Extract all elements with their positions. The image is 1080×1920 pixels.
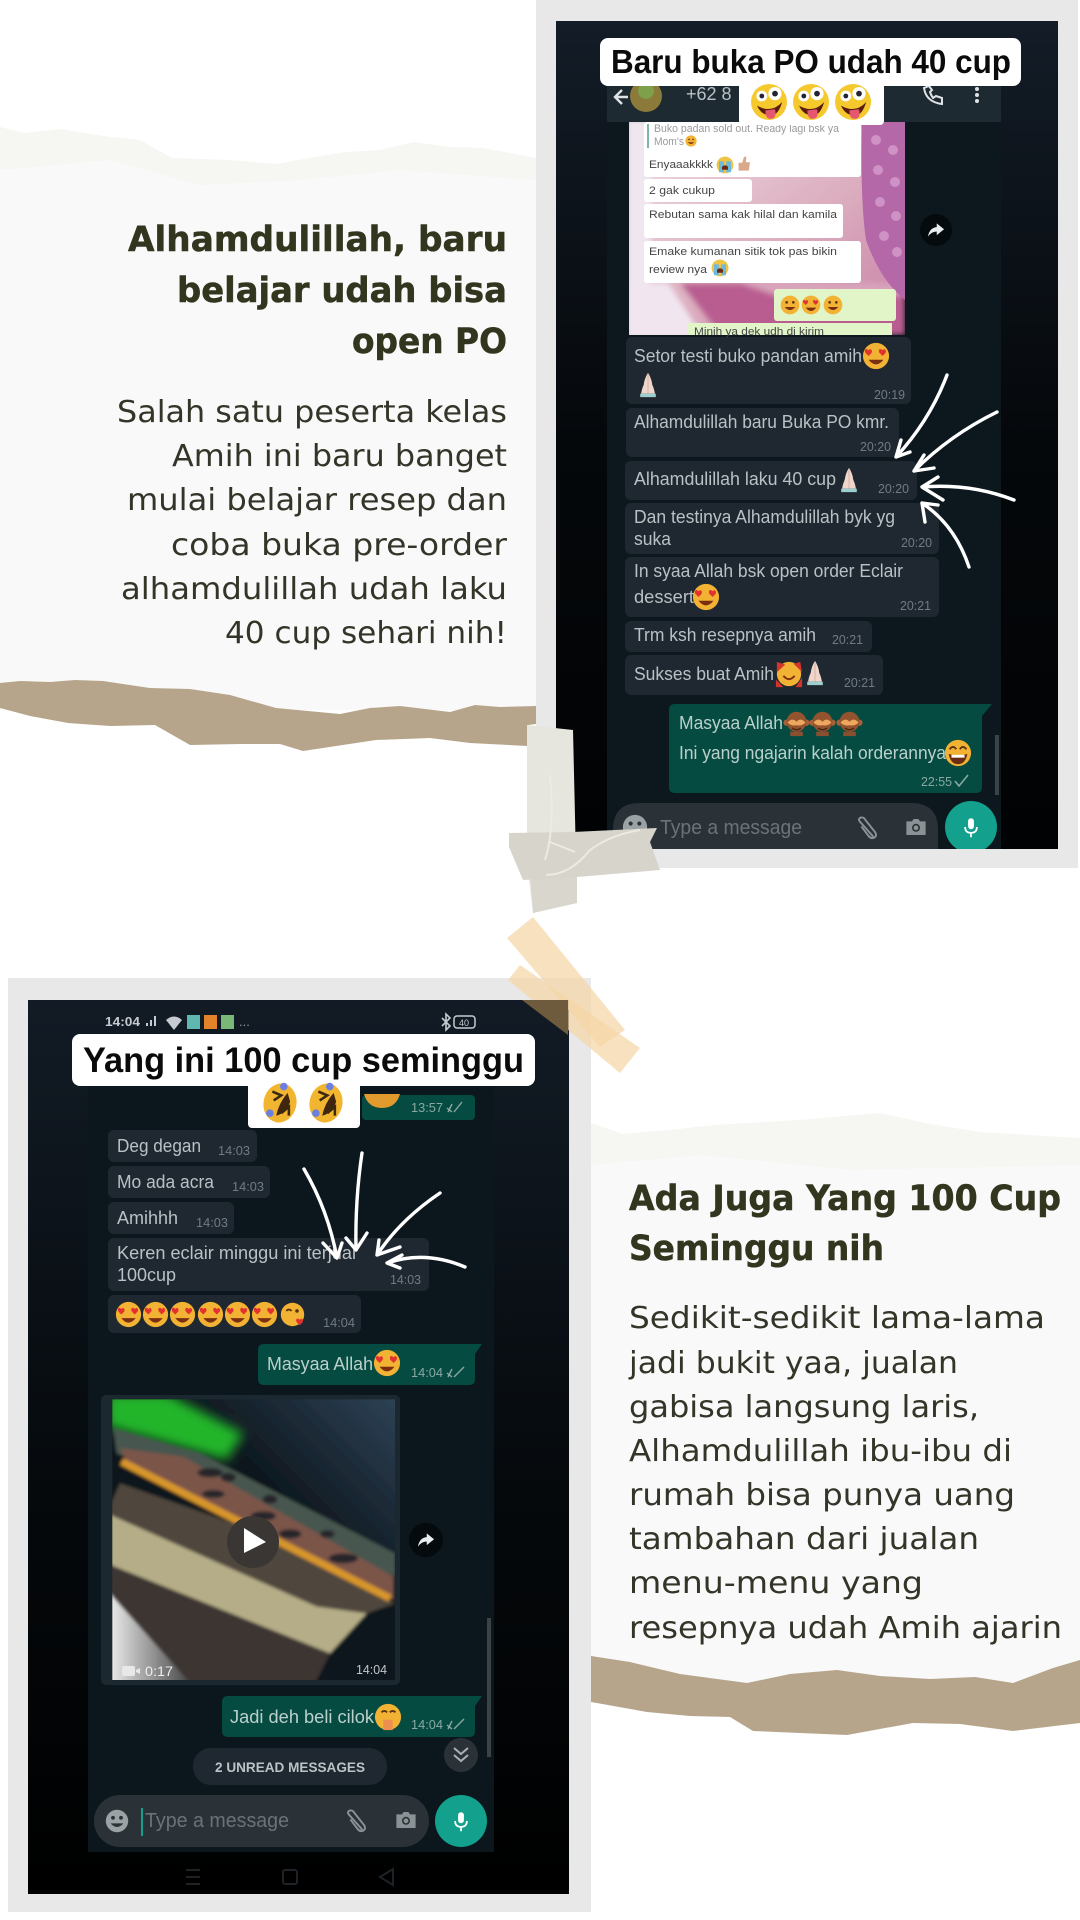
video duration: 0:17 bbox=[145, 1663, 173, 1679]
text block 1: Amih ini baru banget bbox=[172, 439, 507, 474]
unread messages pill bbox=[193, 1748, 387, 1785]
sent message sliver 13:57: 13:57 bbox=[411, 1100, 443, 1115]
mic button 2 bbox=[435, 1795, 487, 1847]
text block 2: menu-menu yang bbox=[629, 1566, 923, 1601]
received chat bubbles 2: 100cup bbox=[117, 1265, 176, 1285]
text block 2: jadi bukit yaa, jualan bbox=[628, 1346, 958, 1381]
received chat bubbles 1: Trm ksh resepnya amih bbox=[634, 625, 816, 645]
sent green bubble 1: Ini yang ngajarin kalah orderannya bbox=[679, 743, 947, 763]
panel: screenshot 2 frame bbox=[8, 978, 591, 1912]
white chat bubbles in photo: Enyaaakkkk bbox=[649, 159, 714, 171]
video duration bbox=[122, 1663, 173, 1679]
status bar bbox=[105, 1014, 475, 1030]
scrollbar 1 bbox=[995, 735, 999, 795]
sent green bubble 1: Masyaa Allah bbox=[679, 713, 783, 733]
heading 1: open PO bbox=[352, 322, 507, 362]
chat column 2 bbox=[88, 1086, 494, 1852]
text block 1: Salah satu peserta kelas bbox=[117, 395, 507, 430]
received chat bubbles 1: Sukses buat Amih bbox=[634, 664, 774, 684]
panel: torn paper note 2 bbox=[591, 1113, 1080, 1735]
white chat bubbles in photo bbox=[644, 122, 896, 338]
sent green bubble 1 bbox=[669, 704, 992, 793]
received chat bubbles 2 bbox=[108, 1130, 429, 1333]
sent bubble Masyaa Allah: Masyaa Allah bbox=[267, 1354, 373, 1374]
panel: torn paper note 1 bbox=[0, 127, 536, 751]
torn kraft paper strip 2 bbox=[591, 1656, 1080, 1735]
sent green bubble 1: 22:55 bbox=[921, 774, 952, 789]
received chat bubbles 2: Deg degan bbox=[117, 1136, 201, 1156]
white chat bubbles in photo: 2 gak cukup bbox=[649, 185, 715, 197]
white chat bubbles in photo: review nya bbox=[649, 264, 708, 276]
chat column 1 bbox=[607, 122, 1001, 849]
chat header 1: +62 8 bbox=[686, 84, 732, 104]
scroll down button bbox=[444, 1738, 478, 1772]
status bar: 40 bbox=[459, 1018, 469, 1028]
received chat bubbles 1: 20:21 bbox=[900, 598, 931, 613]
received chat bubbles 1: 20:19 bbox=[874, 387, 905, 402]
heading 1: Alhamdulillah, baru bbox=[128, 220, 507, 260]
heading 2: Seminggu nih bbox=[629, 1229, 884, 1269]
received chat bubbles 1: Dan testinya Alhamdulillah byk yg bbox=[634, 507, 895, 527]
sent bubble Masyaa Allah bbox=[258, 1344, 482, 1385]
text block 1: 40 cup sehari nih! bbox=[225, 616, 507, 651]
received chat bubbles 1: suka bbox=[634, 529, 672, 549]
unread messages pill: 2 UNREAD MESSAGES bbox=[215, 1759, 365, 1775]
white chat bubbles in photo: Buko padan sold out. Ready lagi bsk ya bbox=[654, 123, 840, 135]
arrows pointing at 40 cup message bbox=[896, 375, 1014, 567]
text block 1: mulai belajar resep dan bbox=[127, 483, 507, 518]
received chat bubbles 1: Setor testi buko pandan amih bbox=[634, 346, 862, 366]
text block 1: coba buka pre-order bbox=[171, 528, 508, 563]
purple knitted fabric bbox=[862, 122, 905, 300]
received chat bubbles 2: 14:03 bbox=[218, 1143, 250, 1158]
received chat bubbles 1: In syaa Allah bsk open order Eclair bbox=[634, 561, 903, 581]
video message: 14:04 bbox=[356, 1662, 387, 1677]
emojis caption 2 bbox=[260, 1080, 346, 1126]
sent bubble Masyaa Allah: 14:04 bbox=[411, 1365, 443, 1380]
heading 1: belajar udah bisa bbox=[177, 271, 507, 311]
received chat bubbles 1: 20:20 bbox=[878, 481, 909, 496]
text block 2 bbox=[628, 1301, 1062, 1646]
white chat bubbles in photo: Minih ya dek udh di kirim bbox=[694, 326, 824, 338]
received chat bubbles 1: Alhamdulillah laku 40 cup bbox=[634, 469, 836, 489]
sent bubble Jadi deh beli cilok: 14:04 bbox=[411, 1717, 443, 1732]
forward icon 1 bbox=[920, 214, 952, 246]
received chat bubbles 2: Mo ada acra bbox=[117, 1172, 215, 1192]
android navigation bar bbox=[186, 1869, 393, 1885]
video message bbox=[101, 1393, 400, 1687]
screenshot 2 dark area bbox=[28, 1000, 569, 1894]
status bar: ... bbox=[239, 1014, 250, 1029]
heading 2: Ada Juga Yang 100 Cup bbox=[629, 1179, 1061, 1219]
white chat bubbles in photo: Mom's bbox=[654, 136, 684, 148]
text block 1: alhamdulillah udah laku bbox=[121, 572, 507, 607]
arrows pointing at 100cup message bbox=[304, 1153, 465, 1268]
text block 2: resepnya udah Amih ajarin bbox=[629, 1611, 1062, 1646]
received chat bubbles 1: Alhamdulillah baru Buka PO kmr. bbox=[634, 412, 889, 432]
message input 1: Type a message bbox=[660, 817, 802, 839]
received chat bubbles 2: 14:03 bbox=[196, 1215, 228, 1230]
white chat bubbles in photo: Emake kumanan sitik tok pas bikin bbox=[649, 246, 837, 258]
received chat bubbles 1: 20:21 bbox=[832, 632, 863, 647]
text block 2: tambahan dari jualan bbox=[629, 1522, 979, 1557]
received chat bubbles 1: 20:20 bbox=[901, 535, 932, 550]
received chat bubbles 2: 14:04 bbox=[323, 1315, 355, 1330]
received chat bubbles 2: 14:03 bbox=[390, 1272, 421, 1287]
caption box 1 bbox=[600, 38, 1021, 125]
text block 1 bbox=[117, 395, 508, 651]
heading 1 bbox=[128, 220, 507, 362]
tape: grey crossed tape bbox=[509, 725, 660, 913]
text block 2: Alhamdulillah ibu-ibu di bbox=[629, 1434, 1012, 1469]
status bar: 14:04 bbox=[105, 1014, 141, 1029]
received chat bubbles 1 bbox=[625, 337, 939, 695]
sent bubble Jadi deh beli cilok bbox=[222, 1696, 482, 1737]
message input 1 bbox=[613, 803, 938, 849]
play button bbox=[227, 1516, 279, 1568]
caption box 1: Baru buka PO udah 40 cup bbox=[611, 43, 1011, 80]
photo inside chat bbox=[625, 118, 905, 340]
heading 2 bbox=[629, 1179, 1061, 1269]
white chat bubbles in photo: Rebutan sama kak hilal dan kamila bbox=[649, 209, 838, 221]
torn kraft paper strip 1 bbox=[0, 680, 536, 751]
tape: orange crossed tape bbox=[507, 917, 640, 1073]
received chat bubbles 1: 20:20 bbox=[860, 439, 891, 454]
caption box 2 bbox=[72, 1034, 535, 1128]
message input 2: Type a message bbox=[145, 1810, 289, 1832]
sent message sliver 13:57 bbox=[362, 1094, 475, 1120]
sent bubble Jadi deh beli cilok: Jadi deh beli cilok bbox=[230, 1707, 375, 1727]
screenshot 1 dark area bbox=[556, 21, 1058, 849]
caption box 2: Yang ini 100 cup seminggu bbox=[83, 1041, 524, 1080]
received chat bubbles 1: dessert bbox=[634, 587, 694, 607]
message input 2 bbox=[94, 1795, 429, 1847]
text block 2: Sedikit-sedikit lama-lama bbox=[629, 1301, 1045, 1336]
emojis caption 1 bbox=[751, 84, 871, 120]
scrollbar 2 bbox=[487, 1618, 491, 1757]
forward icon 2 bbox=[409, 1523, 443, 1557]
received chat bubbles 2: Amihhh bbox=[117, 1208, 178, 1228]
mic button 1 bbox=[945, 801, 997, 853]
chat header 1 bbox=[607, 80, 1001, 122]
received chat bubbles 2: Keren eclair minggu ini terjual bbox=[117, 1243, 356, 1263]
text block 2: gabisa langsung laris, bbox=[629, 1390, 979, 1425]
panel: screenshot 1 frame bbox=[536, 0, 1078, 868]
received chat bubbles 1: 20:21 bbox=[844, 675, 875, 690]
text block 2: rumah bisa punya uang bbox=[629, 1478, 1015, 1513]
received chat bubbles 2: 14:03 bbox=[232, 1179, 264, 1194]
